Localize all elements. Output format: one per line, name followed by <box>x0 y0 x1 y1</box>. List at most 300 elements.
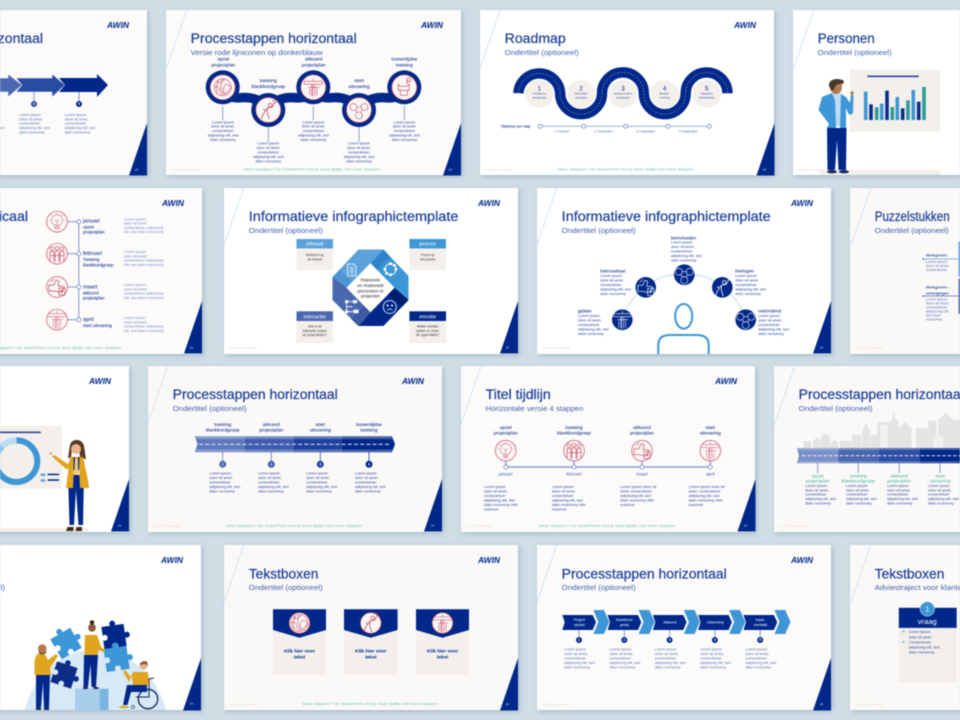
text column 5: adipiscing elit, sed <box>389 134 420 138</box>
label 3: projectplan <box>630 431 654 437</box>
footer note: Meer stappen? Op SharePoint vind je deze tijdlijn met meer stappen <box>244 166 380 172</box>
text: gidsen: gidsen <box>578 308 592 313</box>
text: verbindend: dolor sit amet, <box>758 318 782 322</box>
column 1: dolor sit amet, <box>805 488 829 492</box>
slide: titel tijdlijn: 10-1-2022 / infographics <box>466 524 495 528</box>
column 2: diam nonummy <box>846 501 872 505</box>
step 5: Opstellen <box>701 92 713 96</box>
road arrow <box>195 436 395 452</box>
title: Informatieve infographictemplate <box>562 209 771 224</box>
slide: informatieve infographic octagon: 10-1-2022 / infographics <box>229 346 258 350</box>
slide: tekstboxen: AWIN <box>477 556 501 565</box>
slide: arrows process (cropped left): AWIN <box>106 21 130 30</box>
text column 2: adipiscing elit, sed <box>253 155 284 159</box>
winding road <box>518 72 728 114</box>
icon: globe <box>210 75 235 100</box>
pin 2 <box>268 452 275 468</box>
timeline per step: 1 maand <box>554 130 569 134</box>
vertical timeline <box>67 222 79 320</box>
text 4: Lorem ipsum <box>355 472 377 476</box>
column 2 <box>841 473 877 505</box>
step 3 chevron: Akkoord <box>663 620 676 624</box>
step 4 <box>651 80 679 108</box>
description 4: elit, sed diam nonummy <box>124 329 164 333</box>
box: interactie: de projectleden? <box>303 333 327 337</box>
slide: informatieve infographic octagon: /+ <box>506 345 510 350</box>
description 2: dolor sit amet, <box>124 254 148 258</box>
text 1: diam nonummy nibh <box>484 503 518 507</box>
slide: puzzelillustratie (cropped left): /+ <box>190 701 194 706</box>
subtitle: Ondertitel (optioneel) <box>799 406 873 413</box>
box: proces <box>409 239 446 270</box>
step 1 chevron: Project <box>574 618 585 622</box>
text 1: adipiscing elit, sed <box>209 485 240 489</box>
text: beinvloeden: Lorem ipsum <box>671 241 693 245</box>
column 3: akkoord <box>891 473 908 479</box>
icon: people <box>564 440 584 461</box>
text 4: diam nonummy nibh <box>689 498 722 502</box>
text 4: consectetuer <box>355 480 377 484</box>
octagon centre text: projecten <box>361 294 380 298</box>
step 3 chevron <box>653 610 700 643</box>
text 1: dolor sit amet, <box>209 476 233 480</box>
illustration: presenting man <box>818 79 854 173</box>
column 4: uitvoering <box>929 479 951 485</box>
card 2: Klik hier voor <box>355 649 387 655</box>
step 5 chevron: mentatie <box>754 623 767 627</box>
title: Processtappen horizontaal <box>562 566 727 581</box>
icon: bevlogen <box>712 277 733 298</box>
box: emotie: spelen er onder <box>416 329 440 333</box>
column 2: Lorem ipsum <box>846 484 868 488</box>
arrow chain <box>0 74 108 97</box>
text 2: Lorem ipsum <box>552 485 574 489</box>
illustration: standing woman <box>82 620 105 689</box>
text 2: adipiscing elit, sed <box>610 661 640 665</box>
column 2: consectetuer <box>846 493 868 497</box>
text 2: diam nonummy <box>258 489 284 493</box>
card: vraag: diam nonummy <box>909 651 934 655</box>
column 3: Lorem ipsum <box>887 484 909 488</box>
label: werkgevers: dolor sit amet, <box>926 264 949 268</box>
description 3: Lorem ipsum <box>124 283 146 287</box>
text: verbindend: Lorem ipsum <box>758 314 780 318</box>
card 3 <box>416 609 469 675</box>
column 1: diam nonummy <box>805 501 831 505</box>
label: werkgevers verenigingen <box>922 284 960 321</box>
text 3: Lorem ipsum <box>306 472 328 476</box>
text column 3: dolor sit amet, <box>302 125 325 129</box>
text: beinvloeden: diam nonummy <box>671 258 697 262</box>
step 4: Besluit- <box>660 92 670 96</box>
label: toetsing: toetsing <box>260 78 277 84</box>
slide: puzzelstukken <box>850 188 960 354</box>
card: vraag: dolor sit amet <box>909 635 932 639</box>
text 4: amet, consectetuer <box>689 489 721 493</box>
subtitle: Horizontale versie 4 stappen <box>486 406 584 413</box>
text: gidsen: dolor sit amet, <box>578 318 602 322</box>
column 4: dolor sit amet, <box>928 488 952 492</box>
text 4: euismod <box>689 503 703 507</box>
subtitle: Ondertitel (optioneel) <box>249 585 323 592</box>
text column 2: consectetuer <box>258 150 280 154</box>
box: interactie: interactie tussen <box>303 329 327 333</box>
text column 4: consectetuer <box>348 150 370 154</box>
label: akkoord: akkoord <box>305 57 323 63</box>
footer note: Meer stappen? Op SharePoint vind je deze tijdlijn met meer stappen <box>539 523 675 528</box>
timeline nodes <box>504 465 712 469</box>
text: verbindend: verbindend <box>758 308 781 313</box>
subtitle: Ondertitel (optioneel) <box>249 228 323 235</box>
box: proces: Focus op <box>421 253 435 257</box>
slide: titel tijdlijn <box>461 366 756 532</box>
road <box>797 448 960 463</box>
text: betrouwbaar: diam nonummy <box>600 292 626 296</box>
box: emotie <box>409 311 446 343</box>
text: gidsen: adipiscing elit, sed <box>578 327 609 331</box>
person outline <box>658 304 709 354</box>
slide: titel tijdlijn: AWIN <box>714 377 738 386</box>
illustration: person in wheelchair <box>119 661 158 709</box>
text 4: Lorem ipsum dolor sit <box>689 485 726 489</box>
pin 3: 3 <box>319 463 321 467</box>
text 3: amet, consectetuer <box>620 489 653 493</box>
description 2: Lorem ipsum <box>124 250 146 254</box>
label 2: toetsing <box>565 425 583 431</box>
icon: signpost <box>301 75 326 100</box>
subtitle: Ondertitel (optioneel) <box>818 50 892 57</box>
octagon diagram <box>332 250 408 326</box>
label: opzet projectplan: opzet <box>217 57 230 63</box>
description 3: dolor sit amet, <box>124 287 148 291</box>
text step 4: consectetuer <box>19 122 41 126</box>
label: januari: opzet <box>83 224 95 229</box>
card 1 <box>273 609 326 675</box>
text 5: dolor sit amet, <box>746 652 769 656</box>
step 4: vorming <box>660 96 670 100</box>
text 5: consectetuer <box>746 656 768 660</box>
pin 2: 2 <box>270 463 272 467</box>
text column 5: diam nonummy <box>392 138 417 142</box>
puzzle edge blocks <box>958 242 960 314</box>
months: april <box>706 472 715 477</box>
step 1: Installeren <box>533 92 546 96</box>
text 5: Lorem ipsum <box>746 648 767 652</box>
column 1: adipiscing elit, sed <box>805 497 836 501</box>
slide: processtappen chevrons: AWIN <box>790 556 814 565</box>
icon: beinvloeden <box>674 264 695 285</box>
description 1: dolor sit amet, <box>124 222 148 226</box>
label 1: opzet <box>500 425 512 431</box>
text: verbindend: adipiscing elit, sed <box>758 327 789 331</box>
icon: verbindend <box>735 309 756 330</box>
subtitle: Ondertitel (optioneel) <box>173 406 247 413</box>
text 2: diam nonummy <box>610 665 635 669</box>
card: vraag: 1 <box>925 605 929 614</box>
illustration: man <box>34 644 58 710</box>
slide: tekstboxen: /+ <box>506 702 510 706</box>
step 1 chevron <box>562 610 609 643</box>
pin 3 <box>317 452 324 468</box>
box: emotie: Welke emoties <box>417 325 439 329</box>
text 1: Lorem ipsum <box>209 472 231 476</box>
label 2: akkoord <box>263 422 280 428</box>
text: betrouwbaar: betrouwbaar <box>600 268 626 273</box>
slide: informatieve infographic arc <box>537 188 831 354</box>
slide: tekstboxen adviestraject <box>850 545 960 710</box>
icon: betrouwbaar <box>635 277 656 298</box>
label: maart: maart <box>83 284 98 290</box>
label: werkgevers verenigingen: dolor sit amet, <box>926 301 949 305</box>
wavy circle track <box>206 70 421 127</box>
slide: arrows process (cropped left): /+ <box>135 167 139 172</box>
months <box>498 472 715 477</box>
column 1: opzet <box>812 473 824 479</box>
column 4: consectetuer <box>928 493 950 497</box>
column 3: projectplan <box>887 479 912 485</box>
text 2: dolor sit amet, <box>258 476 282 480</box>
label 3: akkoord <box>633 425 651 431</box>
text 3: diam nonummy nibh <box>620 498 654 502</box>
text: gidsen: diam nonummy <box>578 332 604 336</box>
step 5 chevron: 5 <box>759 638 761 642</box>
step 1: 1 <box>538 86 542 92</box>
text: bevlogen: dolor sit amet, <box>735 278 759 282</box>
text 2: diam nonummy nibh <box>552 503 586 507</box>
label: februari: februari <box>83 251 102 257</box>
step 1: werkgroep <box>533 96 546 100</box>
text 2: consectetuer <box>552 494 574 498</box>
icon: signpost <box>47 309 67 330</box>
timeline per step: Tijdsduur per stap <box>501 124 530 128</box>
text 2: dolor sit amet, <box>610 652 633 656</box>
slide: processtappen road: AWIN <box>401 377 425 386</box>
title: Personen <box>818 31 875 46</box>
text column 5: Lorem ipsum <box>394 120 415 124</box>
icon: bulb <box>47 211 67 232</box>
subtitle: Ondertitel (optioneel) <box>505 50 579 57</box>
timeline nodes <box>77 220 81 322</box>
text step 4: Lorem ipsum <box>19 113 41 117</box>
text 3: diam nonummy <box>306 489 332 493</box>
text 2: dolor sit amet, <box>552 489 576 493</box>
label 4: start <box>706 425 716 431</box>
slide: processtappen city <box>774 366 960 532</box>
text: gidsen: consectetuer <box>578 323 600 327</box>
text 4: adipiscing elit, sed <box>355 485 386 489</box>
slide: roadmap: /+ <box>763 167 767 172</box>
text column 1: dolor sit amet, <box>211 125 235 129</box>
floor <box>0 528 88 532</box>
icon: chair <box>392 75 417 100</box>
timeline per step <box>501 124 711 134</box>
box: interactie: interactie <box>303 315 326 321</box>
step 5 <box>693 80 721 108</box>
title: Puzzelstukken <box>875 209 950 224</box>
slide: tijdlijn verticaal (cropped left): AWIN <box>161 199 185 208</box>
column 4: adipiscing elit, sed <box>928 497 959 501</box>
text 3: adipiscing elit, sed <box>655 661 686 665</box>
text 1: Lorem ipsum <box>564 648 586 652</box>
text 2: consectetuer <box>258 480 280 484</box>
subtitle: Ondertitel (optioneel) <box>562 585 636 592</box>
column 1: Lorem ipsum <box>805 484 827 488</box>
slide: personen: 10-1-2022 / infographics <box>798 168 827 172</box>
label: februari: klankbordgroep <box>83 262 114 267</box>
step 5: transitieplan <box>699 96 715 100</box>
column 4 <box>928 473 959 505</box>
text 4: dolor sit amet, <box>700 652 724 656</box>
label: werkgevers: consectetuer <box>926 268 948 272</box>
step 2 chevron: Klankbord- <box>616 618 634 622</box>
slide: puzzelillustratie (cropped left) <box>0 545 201 710</box>
label 2: klankbordgroep <box>557 431 591 437</box>
pin 1: 1 <box>222 463 224 467</box>
text: gidsen: Lorem ipsum <box>578 314 600 318</box>
pin 1 <box>219 452 226 468</box>
text step 5: dolor sit amet, <box>65 117 88 121</box>
step 2 <box>567 80 595 108</box>
text 4: consectetuer <box>700 656 722 660</box>
column 3: consectetuer <box>887 493 909 497</box>
octagon centre text: processen in <box>357 288 384 294</box>
column 3 <box>887 473 918 505</box>
text 2: adipiscing elit, sed <box>552 498 583 502</box>
text: betrouwbaar: adipiscing elit, sed <box>600 287 631 291</box>
column 2: toetsing <box>850 473 867 479</box>
card 1: Klik hier voor <box>284 649 315 655</box>
months: januari <box>498 472 513 477</box>
text 3: dolor sit amet, <box>655 652 678 656</box>
card: vraag <box>899 602 957 682</box>
step 1 chevron: opstart <box>574 623 585 627</box>
icon: climber <box>256 98 281 122</box>
label: april: start uitvoering <box>83 323 112 328</box>
slide: process steps with circles: 10-1-2022 / infographics <box>172 168 200 172</box>
box: inhoud: inhoud <box>306 242 323 248</box>
label: januari: projectplan <box>83 230 105 235</box>
label: werkgevers: Lorem ipsum <box>926 260 947 264</box>
pedestal <box>75 689 108 710</box>
floor <box>820 170 940 175</box>
text 2: Lorem ipsum <box>610 648 631 652</box>
title: Tekstboxen <box>249 566 318 581</box>
description 1: consectetuer adipiscing <box>124 226 163 230</box>
text column 3: consectetuer <box>303 129 325 133</box>
box: interactie: Hoe is de <box>308 325 322 329</box>
description 4: Lorem ipsum <box>124 316 146 320</box>
step 5 chevron <box>744 610 790 643</box>
slide: persoon met donutgrafiek (cropped left) <box>0 366 129 532</box>
timeline per step: 2 maanden <box>594 130 613 134</box>
slide: informatieve infographic arc: 10-1-2022 / infographics <box>542 346 571 350</box>
step 2: opvragen <box>575 96 587 100</box>
box: proces: het proces <box>420 257 436 261</box>
label: maart: akkoord <box>83 290 99 295</box>
card 3: tekst <box>437 655 449 661</box>
slide: process steps with circles: /+ <box>449 167 453 172</box>
slide: titel tijdlijn: /+ <box>744 523 748 528</box>
label: werkgevers verenigingen: Lorem ipsum <box>926 297 947 301</box>
column 4: Lorem ipsum <box>928 484 950 488</box>
text 1: diam nonummy <box>209 489 235 493</box>
text: beinvloeden: adipiscing elit, sed <box>671 254 702 258</box>
subtitle: Ondertitel (optioneel) <box>875 228 949 235</box>
text 4: diam nonummy <box>700 665 726 669</box>
step 2 chevron: 2 <box>623 638 625 642</box>
slide: puzzelillustratie (cropped left): AWIN <box>160 556 184 565</box>
text column 1: diam nonummy <box>210 138 236 142</box>
text 1: consectetuer <box>209 480 232 484</box>
step 3 <box>609 80 637 108</box>
text 1: dolor sit amet, <box>484 489 508 493</box>
slide: tekstboxen: 10-1-2022 / infographics <box>229 702 258 706</box>
text 4: adipiscing elit, sed <box>700 661 731 665</box>
text 1: consectetuer <box>484 494 506 498</box>
title: Processtappen horizontaal <box>191 31 357 46</box>
label 1: projectplan <box>494 431 518 437</box>
text column 3: diam nonummy <box>301 138 326 142</box>
board with donut chart <box>0 426 62 489</box>
label 1: klankbordgroep <box>206 427 240 433</box>
step 4 chevron: Uitwerking <box>707 620 724 624</box>
label: toetsing: klankbordgroep <box>251 84 285 90</box>
text 2: Lorem ipsum <box>258 472 280 476</box>
box: inhoud: de inhoud <box>307 257 322 261</box>
text column 4: Lorem ipsum <box>348 142 370 146</box>
timeline per step: 8 maanden <box>636 130 655 134</box>
card 2 <box>344 609 398 675</box>
step 3: 3 <box>621 86 625 92</box>
timeline <box>506 461 710 467</box>
octagon centre text: en irrationele <box>357 283 384 288</box>
column 1 <box>805 473 836 505</box>
description 2: elit, sed diam nonummy <box>124 263 164 267</box>
slide: processtappen chevrons: /+ <box>820 702 824 706</box>
step 4 chevron: 4 <box>714 638 716 642</box>
background blob <box>25 650 166 710</box>
label: werkgevers verenigingen: nonummy <box>926 317 942 321</box>
label 1: toetsing <box>214 422 232 428</box>
icon: face <box>383 300 396 314</box>
text column 3: adipiscing elit, sed <box>298 134 329 138</box>
text column 2: dolor sit amet, <box>257 146 280 150</box>
text 3: Lorem ipsum dolor sit <box>620 485 657 489</box>
text: verbindend: consectetuer <box>758 323 781 327</box>
subtitle: Ondertitel (optioneel) <box>562 228 636 235</box>
text step 5: consectetuer <box>65 122 87 126</box>
label 4: toetsing <box>360 427 378 433</box>
label 2: projectplan <box>259 427 284 433</box>
box: interactie <box>296 311 333 343</box>
text 3: euismod <box>620 503 634 507</box>
label: maart: projectplan <box>83 296 105 301</box>
text 1: diam nonummy <box>564 665 590 669</box>
text: beinvloeden: beïnvloeden <box>671 235 696 240</box>
icon: bulb <box>495 440 516 461</box>
text column 5: consectetuer <box>394 129 416 133</box>
description 4: dolor sit amet, <box>124 320 148 324</box>
card: vraag: Consectetuer <box>909 640 932 644</box>
step 3: werkgroep <box>616 96 630 100</box>
step 5 chevron: Imple- <box>756 618 766 622</box>
box: emotie: de oppervlakte? <box>416 333 440 337</box>
text 4: diam nonummy <box>355 489 381 493</box>
slide: processtappen chevrons: 10-1-2022 / infographics <box>542 702 571 706</box>
text 3: Lorem ipsum <box>655 648 677 652</box>
step 3 chevron: 3 <box>669 638 671 642</box>
slide: process steps with circles <box>166 10 461 176</box>
